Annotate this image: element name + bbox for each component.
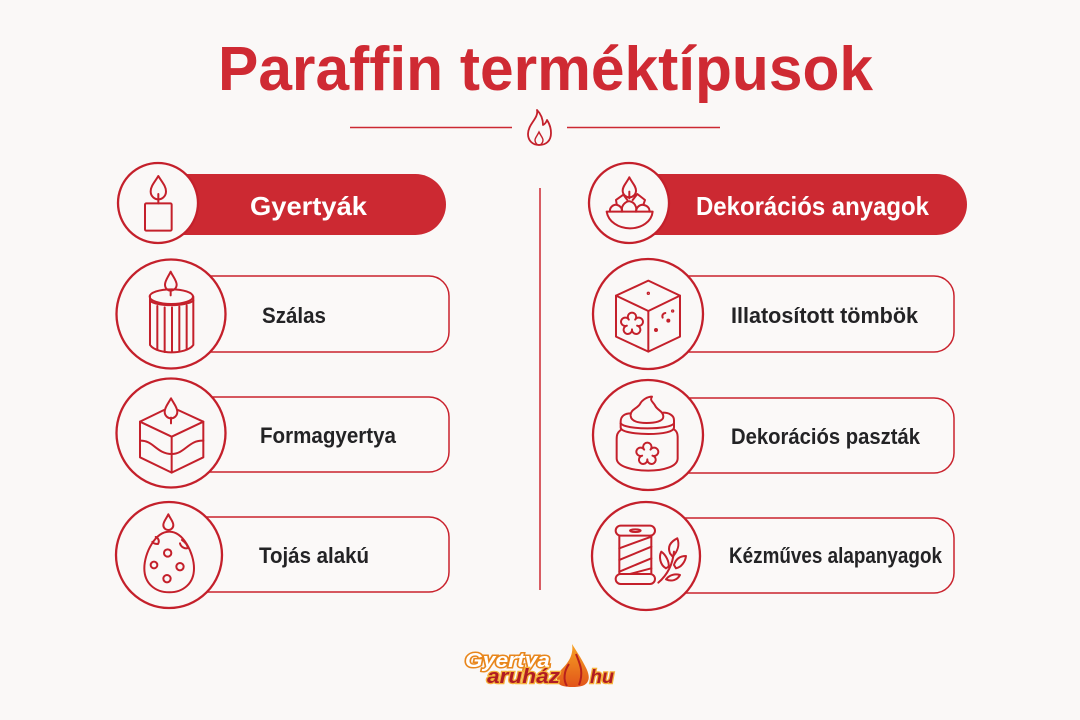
header: Dekorációs anyagok: Dekorációs anyagok bbox=[696, 191, 929, 221]
logo: Gyertya aruház hu: hu bbox=[590, 667, 614, 688]
header: Gyertyák bbox=[118, 163, 446, 243]
icon: egg candle bbox=[144, 514, 194, 592]
logo: Gyertya aruház hu: Gyertya bbox=[465, 650, 550, 672]
header: Gyertyák: Gyertyák bbox=[250, 191, 368, 221]
title ornament: lines and flame bbox=[350, 110, 720, 145]
icon: paste jar bbox=[617, 397, 678, 471]
icon: candle bbox=[145, 176, 172, 231]
card: Tojás alakú bbox=[116, 502, 449, 608]
center divider bbox=[539, 188, 541, 590]
card: Szálas: Szálas bbox=[262, 303, 326, 328]
icon: ribbed pillar candle bbox=[150, 272, 193, 352]
card: Tojás alakú: Tojás alakú bbox=[259, 543, 369, 568]
header: Dekorációs anyagok bbox=[589, 163, 967, 243]
card: Szálas bbox=[116, 260, 449, 368]
card: Formagyertya: Formagyertya bbox=[260, 423, 397, 448]
card: Illatosított tömbök bbox=[593, 259, 954, 369]
card: Kézműves alapanyagok bbox=[592, 502, 954, 610]
icon: moulded cube candle bbox=[140, 398, 203, 473]
icon: logo flame bbox=[557, 644, 589, 687]
panel: Gyertyák column bbox=[116, 163, 449, 608]
icon: bowl of wax pieces bbox=[607, 177, 653, 228]
card: Formagyertya bbox=[116, 378, 449, 488]
panel: Dekorációs anyagok column bbox=[589, 163, 967, 610]
card: Dekorációs paszták bbox=[593, 380, 954, 490]
icon: scented cube bbox=[616, 281, 680, 352]
card: Kézműves alapanyagok: Kézműves alapanyagok bbox=[729, 543, 943, 568]
logo: Gyertya aruház hu: aruház bbox=[487, 666, 560, 688]
card: Illatosított tömbök: Illatosított tömbök bbox=[731, 303, 919, 328]
card: Dekorációs paszták: Dekorációs paszták bbox=[731, 424, 921, 449]
icon: thread spool and sprig bbox=[616, 526, 686, 584]
logo: Gyertya aruház hu bbox=[465, 644, 614, 688]
title: Paraffin terméktípusok bbox=[218, 35, 874, 104]
